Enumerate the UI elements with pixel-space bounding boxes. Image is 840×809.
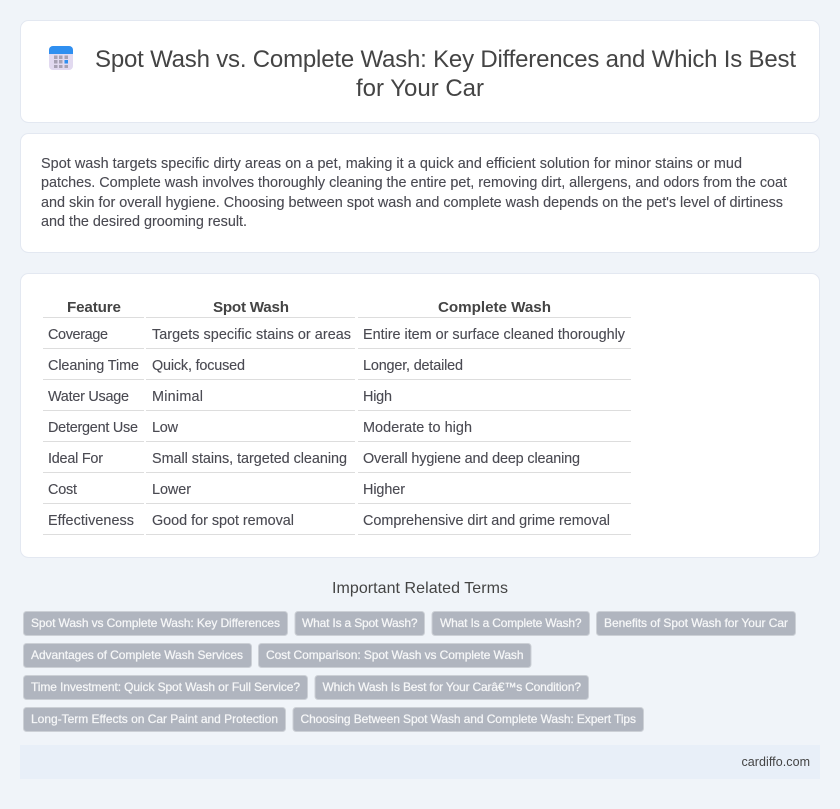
row: ideal for: Overall hygiene and deep cleaning — [363, 451, 580, 467]
row: water usage: Water Usage — [48, 389, 129, 405]
icon: calendar — [49, 46, 73, 70]
tag: cost comparison — [258, 644, 531, 668]
tag: long-term effects — [24, 708, 286, 732]
row: coverage: Targets specific stains or areas — [152, 327, 351, 343]
tag: what is a spot wash — [295, 612, 424, 636]
row: cleaning time — [48, 358, 463, 374]
tag: what is a complete wash: What Is a Complete Wash? — [440, 616, 582, 630]
row: cleaning time: Quick, focused — [152, 358, 245, 374]
row: detergent use — [48, 420, 472, 436]
row: water usage: Minimal — [152, 389, 203, 405]
row: detergent use: Moderate to high — [363, 420, 472, 436]
tag: long-term effects: Long-Term Effects on Car Paint and Protection — [31, 712, 278, 726]
tag: time investment — [24, 676, 308, 700]
row: effectiveness — [48, 513, 610, 529]
footer: cardiffo.com — [742, 755, 810, 769]
row: cost: Cost — [48, 482, 77, 498]
tag: benefits of spot wash — [596, 612, 796, 636]
tag: time investment: Time Investment: Quick Spot Wash or Full Service? — [31, 680, 300, 694]
tag: cost comparison: Cost Comparison: Spot Wash vs Complete Wash — [266, 648, 524, 662]
row: ideal for: Small stains, targeted cleaning — [152, 451, 347, 467]
footer — [20, 745, 820, 779]
table header — [67, 299, 551, 316]
text block: introduction: and the desired grooming result. — [41, 214, 247, 230]
table header: Feature — [67, 299, 121, 316]
row: detergent use: Low — [152, 420, 179, 436]
row: cleaning time: Cleaning Time — [48, 358, 139, 374]
heading: related terms: Important Related Terms — [332, 580, 508, 597]
tag: key differences — [24, 612, 288, 636]
related term tags — [24, 612, 796, 732]
text block: introduction: patches. Complete wash involves thoroughly cleaning the entire pet, removing dirt, allergens, and odors from the coat — [41, 175, 787, 191]
title: for Your Car — [356, 75, 484, 102]
tag: what is a spot wash: What Is a Spot Wash? — [302, 616, 418, 630]
tag: advantages of complete wash — [24, 644, 252, 668]
row: effectiveness: Good for spot removal — [152, 513, 294, 529]
row: cleaning time: Longer, detailed — [363, 358, 463, 374]
row: coverage — [48, 327, 626, 343]
row: effectiveness: Effectiveness — [48, 513, 134, 529]
row: cost: Higher — [363, 482, 405, 498]
row: coverage: Coverage — [48, 327, 108, 343]
text block: introduction: and skin for overall hygiene. Choosing between spot wash and complete wash depends on the pet's level of dirtiness — [41, 195, 783, 211]
tag: expert tips — [293, 708, 644, 732]
row: cost: Lower — [152, 482, 191, 498]
tag: which wash is best: Which Wash Is Best for Your Carâ€™s Condition? — [322, 680, 581, 694]
row: coverage: Entire item or surface cleaned thoroughly — [363, 327, 626, 343]
title: Spot Wash vs. Complete Wash: Key Differences and Which Is Best — [95, 46, 796, 73]
table header: Complete Wash — [438, 299, 551, 316]
tag: key differences: Spot Wash vs Complete Wash: Key Differences — [31, 616, 280, 630]
tag: which wash is best — [315, 676, 588, 700]
panel: comparison table — [20, 274, 820, 558]
tag: what is a complete wash — [432, 612, 590, 636]
row: water usage — [48, 389, 392, 405]
row: detergent use: Detergent Use — [48, 420, 138, 436]
tag: benefits of spot wash: Benefits of Spot Wash for Your Car — [604, 616, 788, 630]
panel: title card — [20, 20, 820, 122]
row: water usage: High — [363, 389, 392, 405]
tag: expert tips: Choosing Between Spot Wash and Complete Wash: Expert Tips — [300, 712, 636, 726]
title — [95, 46, 796, 102]
row: cost — [48, 482, 405, 498]
text block: introduction — [41, 156, 787, 230]
panel: introduction — [20, 134, 820, 252]
row: effectiveness: Comprehensive dirt and grime removal — [363, 513, 610, 529]
row: ideal for — [48, 451, 580, 467]
row: ideal for: Ideal For — [48, 451, 103, 467]
tag: advantages of complete wash: Advantages of Complete Wash Services — [31, 648, 243, 662]
table header: Spot Wash — [213, 299, 289, 316]
text block: introduction: Spot wash targets specific dirty areas on a pet, making it a quick and efficient solution for minor stains or mud — [41, 156, 742, 172]
